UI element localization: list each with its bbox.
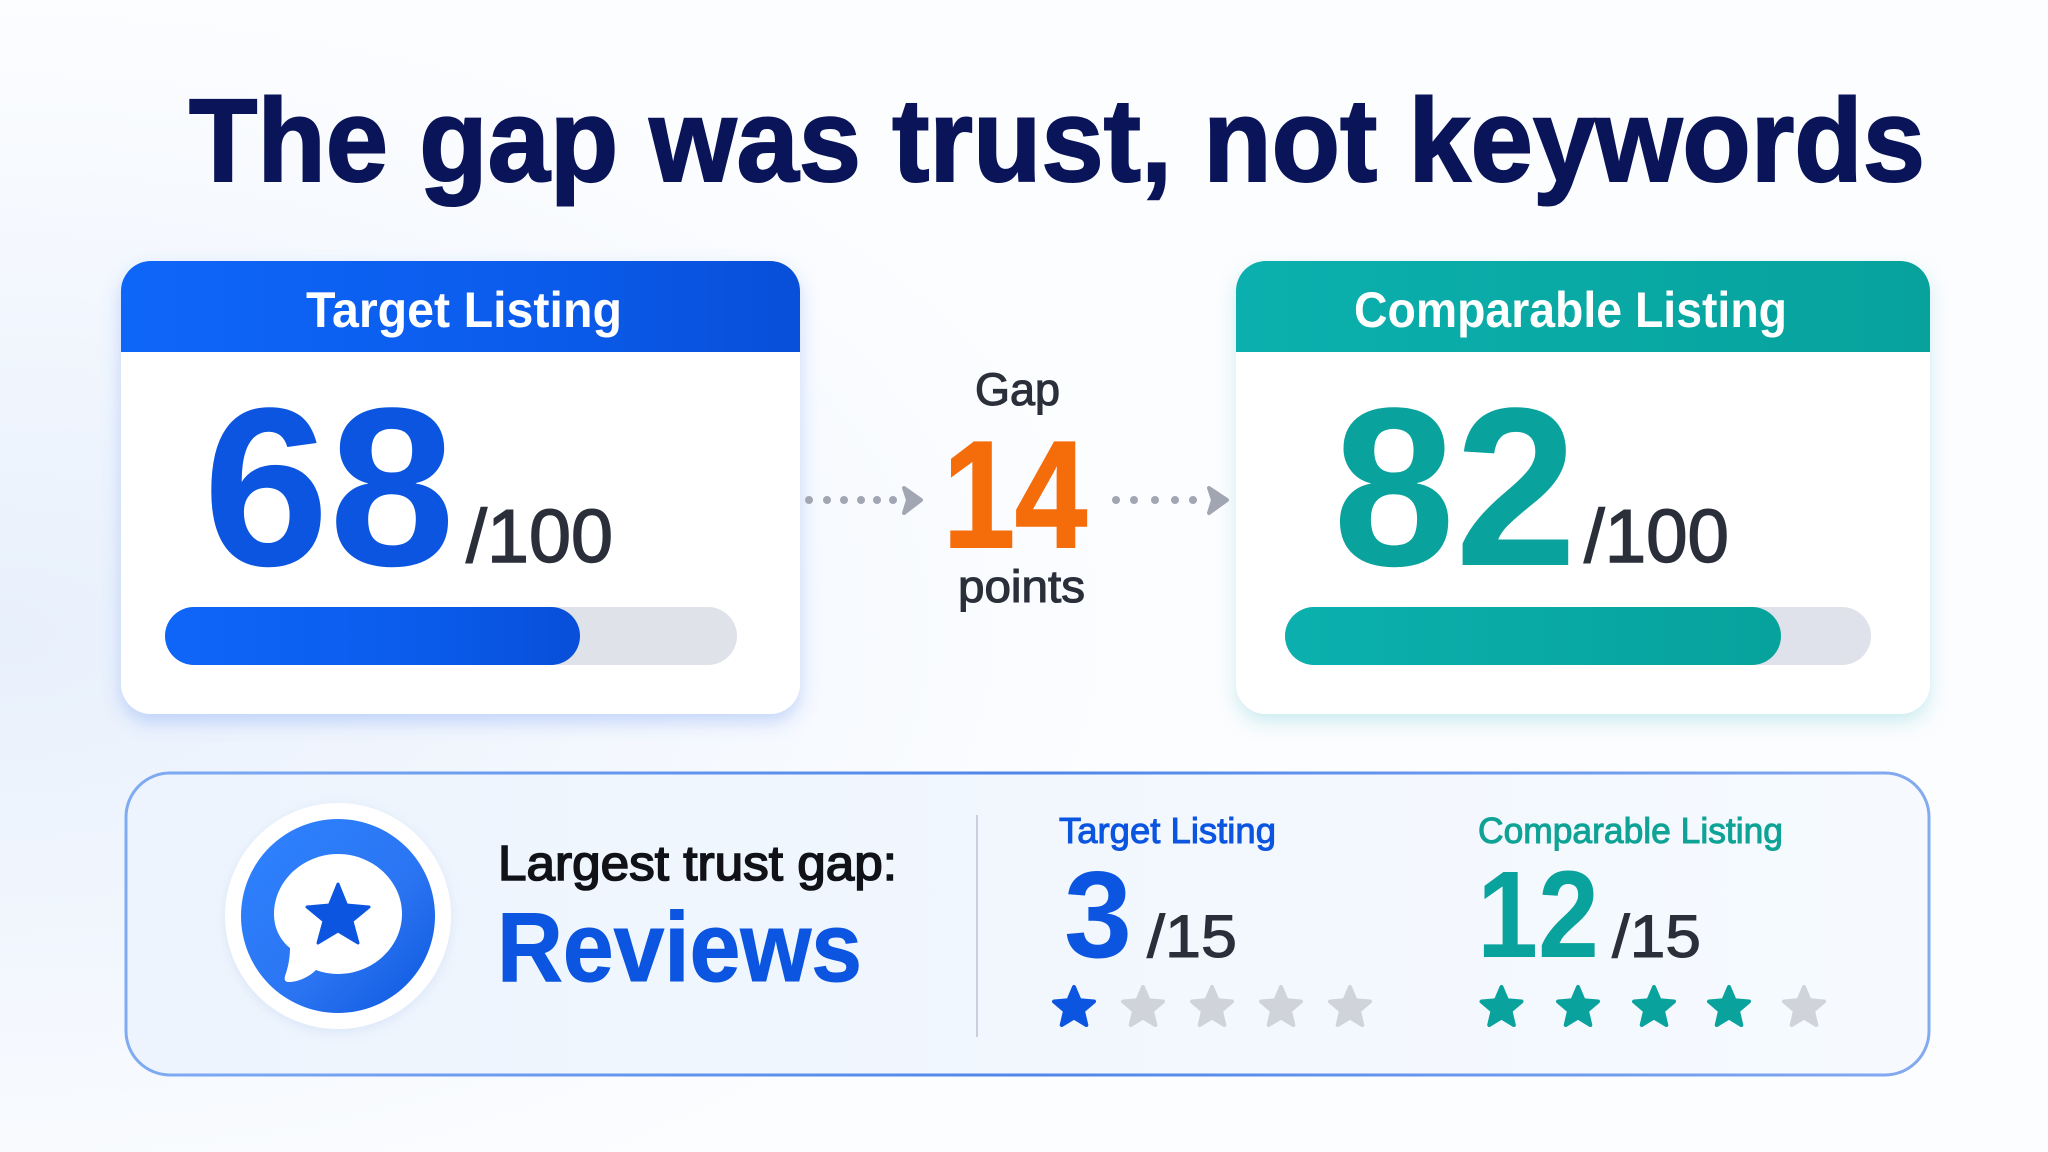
comparable card header: Comparable Listing bbox=[1354, 282, 1787, 338]
gap label: Gap bbox=[975, 364, 1060, 415]
target review count: 3 bbox=[1064, 847, 1132, 984]
comparable review max: /15 bbox=[1612, 903, 1701, 970]
target reviews column bbox=[1054, 810, 1370, 1025]
comparable review count: 12 bbox=[1477, 847, 1599, 984]
target progress bar bbox=[165, 607, 737, 665]
arrow: right dotted arrow bbox=[1112, 488, 1227, 513]
target card header bbox=[121, 261, 800, 352]
target card header: Target Listing bbox=[306, 282, 622, 338]
comparable listing label: Comparable Listing bbox=[1478, 810, 1783, 851]
comparable progress bar bbox=[1285, 607, 1871, 665]
panel: largest trust gap bbox=[126, 773, 1929, 1075]
target score 68: 68 bbox=[203, 360, 455, 613]
target star rating bbox=[1054, 987, 1370, 1025]
comparable card header bbox=[1236, 261, 1930, 352]
divider bbox=[976, 815, 978, 1037]
target score out of 100: /100 bbox=[466, 494, 613, 578]
arrow: left dotted arrow bbox=[805, 488, 921, 513]
comparable score 82: 82 bbox=[1333, 360, 1577, 613]
panel: comparable listing score card bbox=[1236, 261, 1930, 714]
panel: gap callout bbox=[805, 364, 1227, 612]
points label: points bbox=[958, 561, 1085, 612]
comparable reviews column bbox=[1477, 810, 1824, 1025]
largest trust gap label: Largest trust gap: bbox=[498, 837, 897, 891]
target listing label: Target Listing bbox=[1059, 810, 1276, 851]
comparable star rating bbox=[1482, 987, 1824, 1025]
panel: target listing score card bbox=[121, 261, 800, 714]
gap value 14: 14 bbox=[943, 410, 1087, 580]
target review max: /15 bbox=[1147, 903, 1237, 970]
icon: review speech bubble with star bbox=[225, 803, 451, 1029]
comparable score out of 100: /100 bbox=[1584, 494, 1729, 578]
reviews heading: Reviews bbox=[497, 892, 862, 1002]
title: The gap was trust, not keywords bbox=[189, 75, 1925, 207]
